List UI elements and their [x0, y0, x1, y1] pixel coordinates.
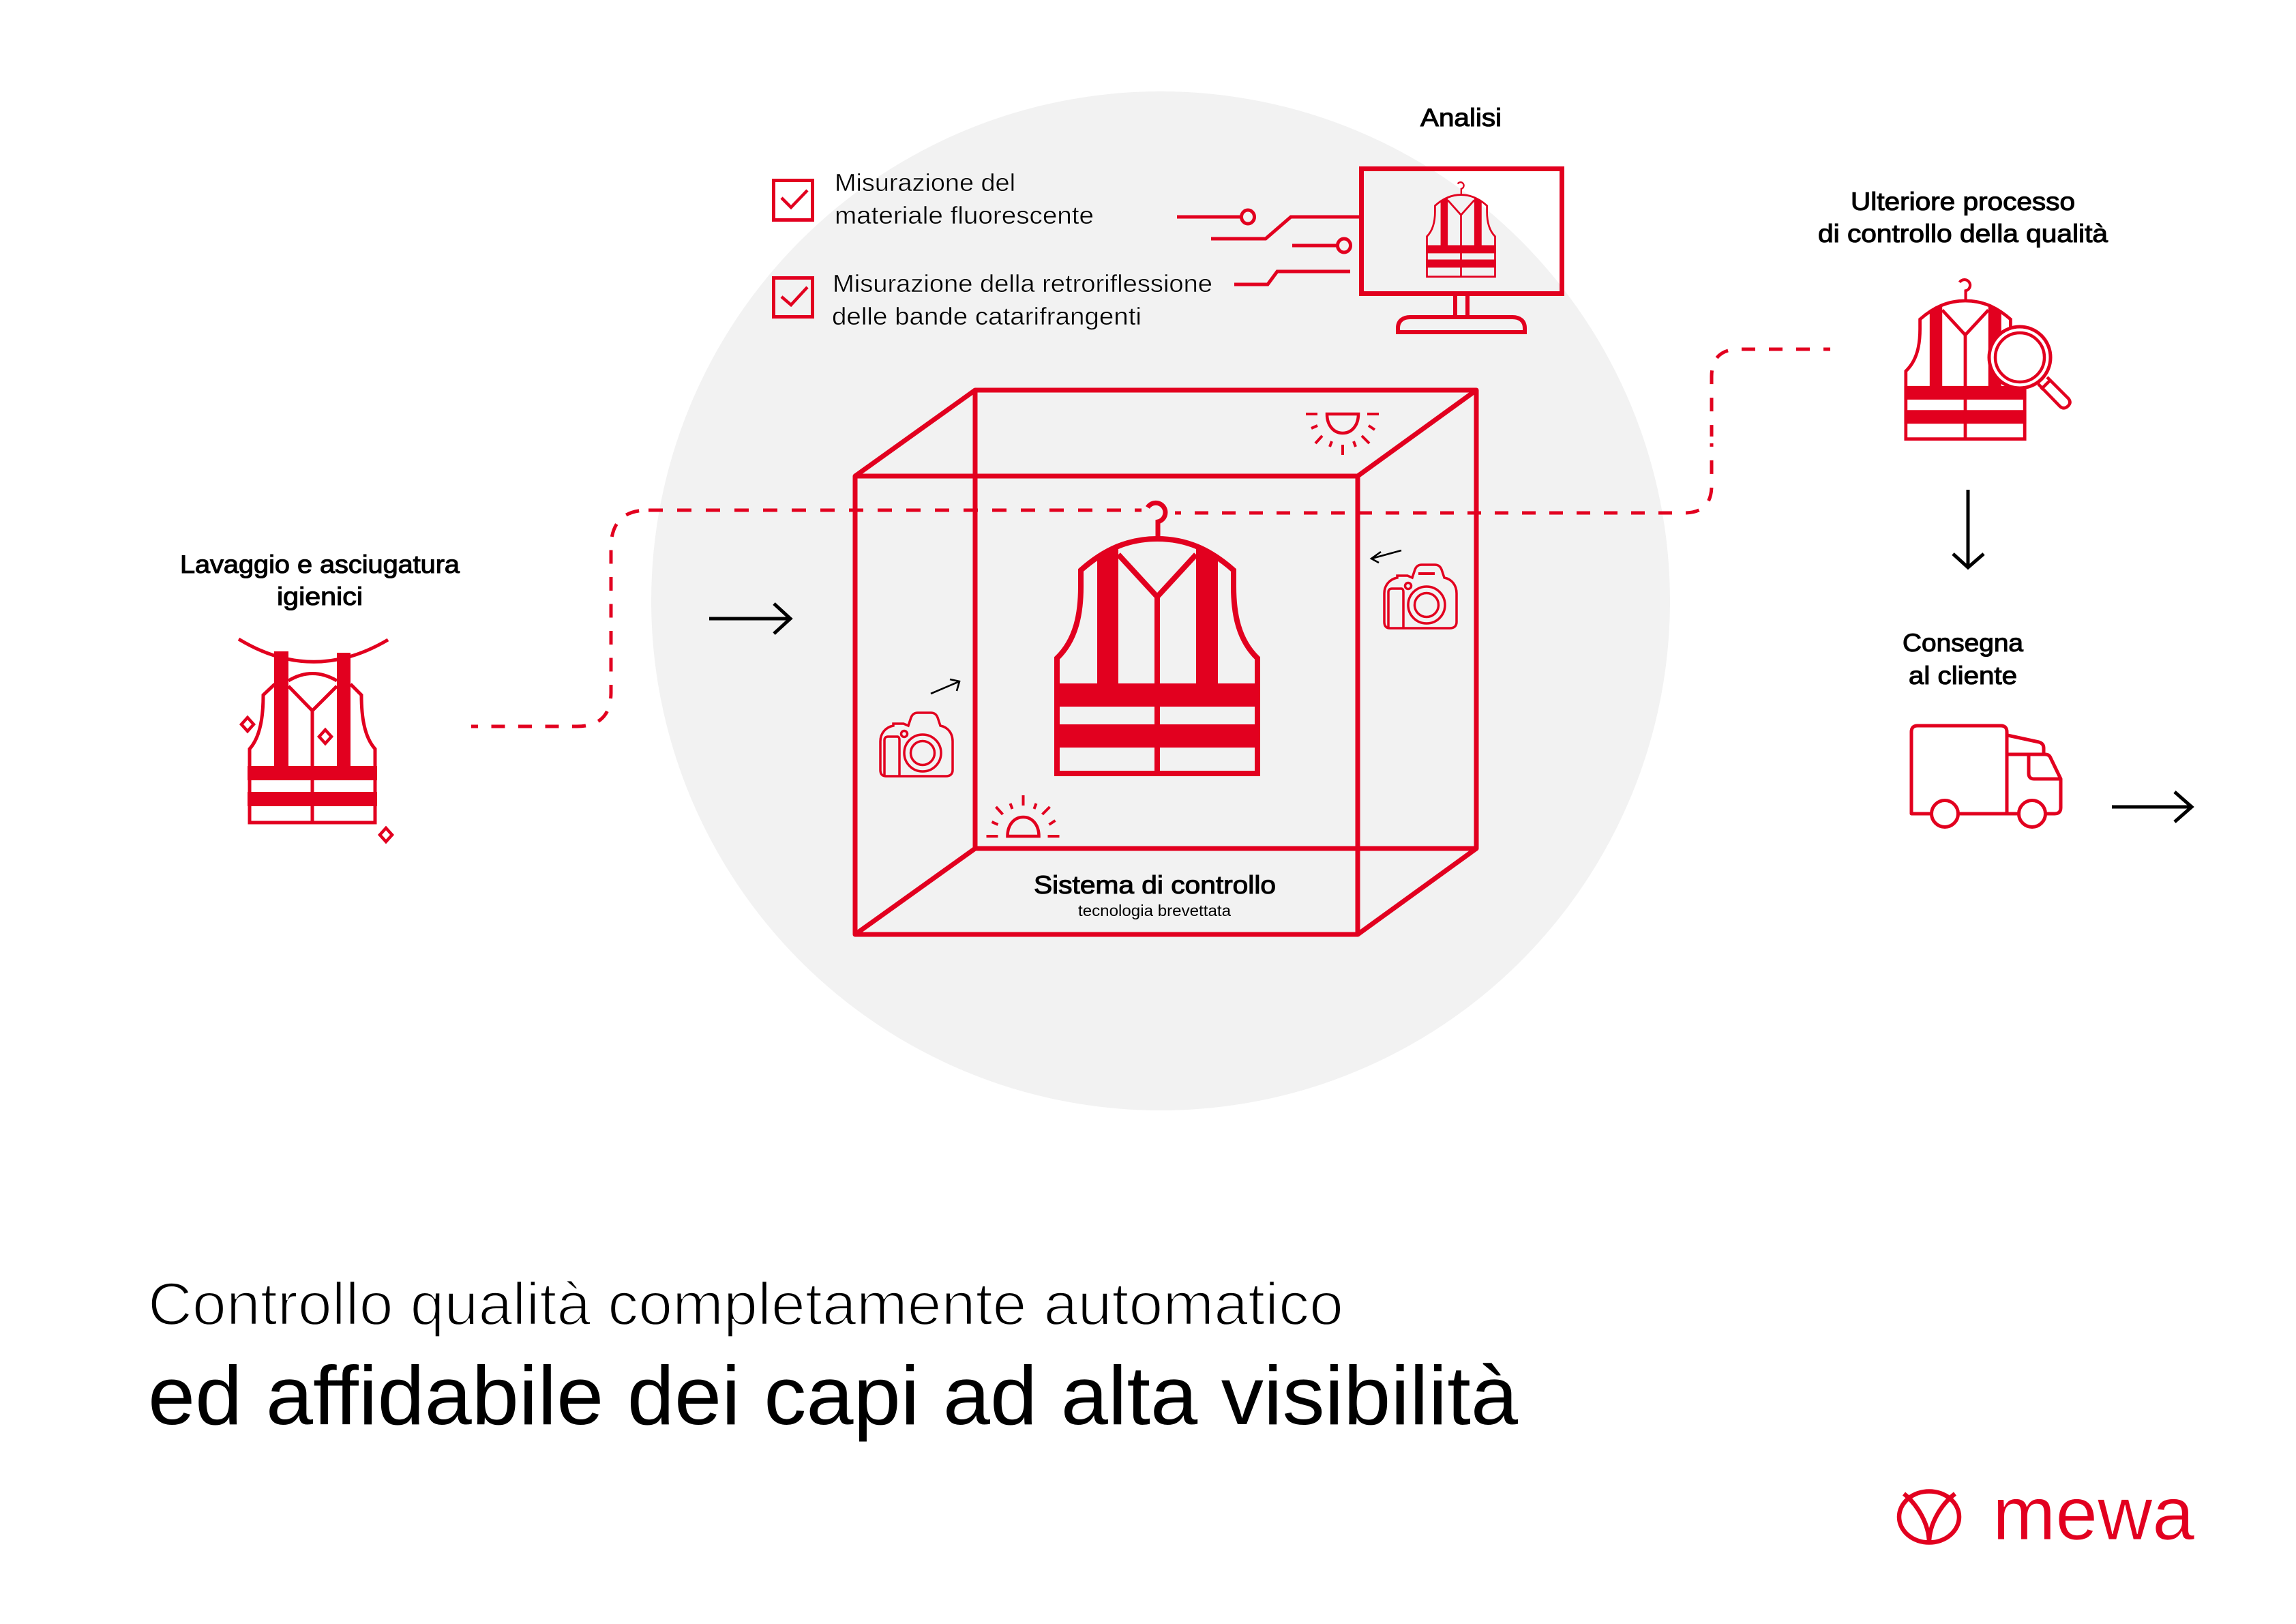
central vest on hanger — [1054, 503, 1260, 773]
lamp: bottom — [986, 795, 1060, 836]
background circle — [651, 91, 1670, 1110]
camera: left — [880, 713, 953, 776]
black arrow out — [2112, 792, 2192, 822]
camera: right — [1384, 565, 1457, 628]
dashed process path: control system to further inspection — [1175, 349, 1830, 513]
black arrow down — [1953, 490, 1984, 567]
checkbox 1 — [773, 180, 813, 220]
black arrow into cube — [709, 604, 790, 634]
title: ed affidabile dei capi ad alta visibilità — [148, 1349, 1518, 1442]
text: fluorescent measurement — [835, 168, 1094, 229]
text: fluorescent measurement: Misurazione del — [835, 168, 1015, 196]
label: delivery: Consegna — [1903, 629, 2023, 657]
text: retroreflection measurement: Misurazione della retroriflessione — [833, 269, 1212, 297]
dashed process path: laundry to control system — [471, 510, 1142, 726]
title — [148, 1270, 1518, 1442]
label: analysis: Analisi — [1420, 104, 1502, 132]
label: control system: Sistema di controllo — [1034, 871, 1276, 899]
logo: mewa: mewa — [1993, 1472, 2195, 1556]
label: delivery: al cliente — [1909, 662, 2017, 690]
vest in monitor — [1426, 182, 1496, 277]
label: delivery — [1903, 629, 2023, 690]
control system cube — [855, 390, 1476, 934]
title: Controllo qualità completamente automatico — [148, 1270, 1343, 1338]
small arrow: right camera — [1371, 550, 1401, 563]
label: further quality control — [1818, 188, 2108, 248]
text: fluorescent measurement: materiale fluorescente — [835, 201, 1094, 229]
checkbox 2 — [773, 278, 813, 316]
icon: vest with magnifier — [1904, 280, 2070, 439]
text: retroreflection measurement — [832, 269, 1212, 330]
lamp: top — [1306, 414, 1379, 455]
label: control system — [1034, 871, 1276, 919]
label: further quality control: di controllo della qualità — [1818, 220, 2108, 248]
label: control system: tecnologia brevettata — [1078, 902, 1231, 919]
logo: mewa — [1899, 1472, 2195, 1556]
icon: truck — [1911, 726, 2061, 827]
text: retroreflection measurement: delle bande catarifrangenti — [832, 302, 1142, 330]
small arrow: left camera — [931, 679, 959, 694]
label: washing and drying: Lavaggio e asciugatura — [180, 550, 460, 578]
label: washing and drying: igienici — [277, 582, 363, 610]
icon: vest on clothesline — [239, 639, 392, 842]
label: further quality control: Ulteriore processo — [1851, 188, 2075, 216]
sparkles — [241, 718, 392, 842]
icon: monitor — [1361, 169, 1562, 332]
circuit lines — [1177, 210, 1359, 284]
label: washing and drying — [180, 550, 460, 610]
